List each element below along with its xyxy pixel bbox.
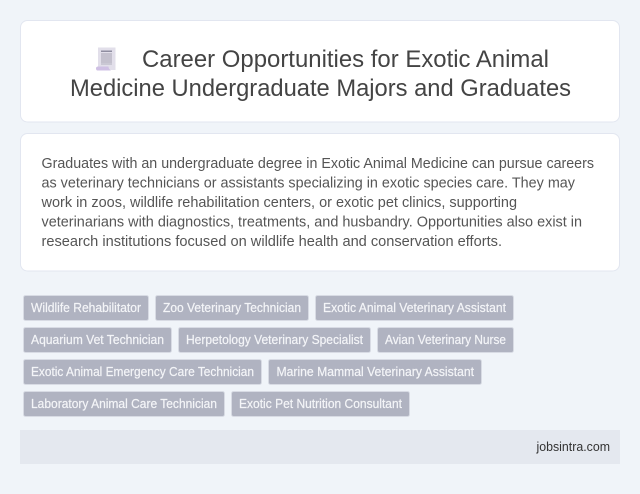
tag: Wildlife Rehabilitator [24, 296, 148, 320]
text block: description: Graduates with an undergraduate degree in Exotic Animal Medicine can pursue careers [42, 156, 594, 172]
panel: header [20, 20, 620, 122]
tag list [24, 296, 514, 416]
text block: description: work in zoos, wildlife rehabilitation centers, or exotic pet clinics, supporting [41, 195, 517, 211]
tag: Avian Veterinary Nurse [378, 328, 514, 352]
tag: Laboratory Animal Care Technician: Laboratory Animal Care Technician [31, 397, 217, 411]
title: Career Opportunities for Exotic Animal [142, 46, 549, 73]
footer link text: jobsintra.com [536, 440, 610, 454]
tag: Aquarium Vet Technician [24, 328, 172, 352]
tag: Exotic Animal Veterinary Assistant: Exotic Animal Veterinary Assistant [323, 301, 507, 315]
tag: Marine Mammal Veterinary Assistant: Marine Mammal Veterinary Assistant [276, 365, 475, 379]
text block: description [41, 156, 594, 250]
tag: Exotic Pet Nutrition Consultant [232, 392, 410, 416]
tag: Exotic Pet Nutrition Consultant: Exotic Pet Nutrition Consultant [239, 397, 403, 411]
icon: scroll document [96, 48, 116, 70]
title: Medicine Undergraduate Majors and Graduates [70, 75, 571, 102]
text block: description: research institutions focused on wildlife health and conservation efforts. [42, 234, 502, 250]
tag: Exotic Animal Emergency Care Technician: Exotic Animal Emergency Care Technician [31, 365, 254, 379]
tag: Exotic Animal Veterinary Assistant [316, 296, 514, 320]
footer [20, 430, 620, 464]
tag: Avian Veterinary Nurse: Avian Veterinary Nurse [385, 333, 506, 347]
tag: Herpetology Veterinary Specialist [178, 328, 370, 352]
tag: Exotic Animal Emergency Care Technician [24, 360, 262, 384]
text block: description: as veterinary technicians or assistants specializing in exotic species care. They may [42, 176, 576, 192]
tag: Laboratory Animal Care Technician [24, 392, 224, 416]
tag: Herpetology Veterinary Specialist: Herpetology Veterinary Specialist [186, 333, 364, 347]
tag: Marine Mammal Veterinary Assistant [268, 360, 482, 384]
tag: Wildlife Rehabilitator: Wildlife Rehabilitator [31, 301, 141, 315]
title [70, 46, 571, 102]
tag: Aquarium Vet Technician: Aquarium Vet Technician [31, 333, 164, 347]
panel: description [20, 134, 620, 271]
tag: Zoo Veterinary Technician: Zoo Veterinary Technician [163, 301, 301, 315]
text block: description: veterinarians with diagnostics, treatments, and husbandry. Opportunities also exist in [42, 214, 582, 230]
tag: Zoo Veterinary Technician [156, 296, 308, 320]
